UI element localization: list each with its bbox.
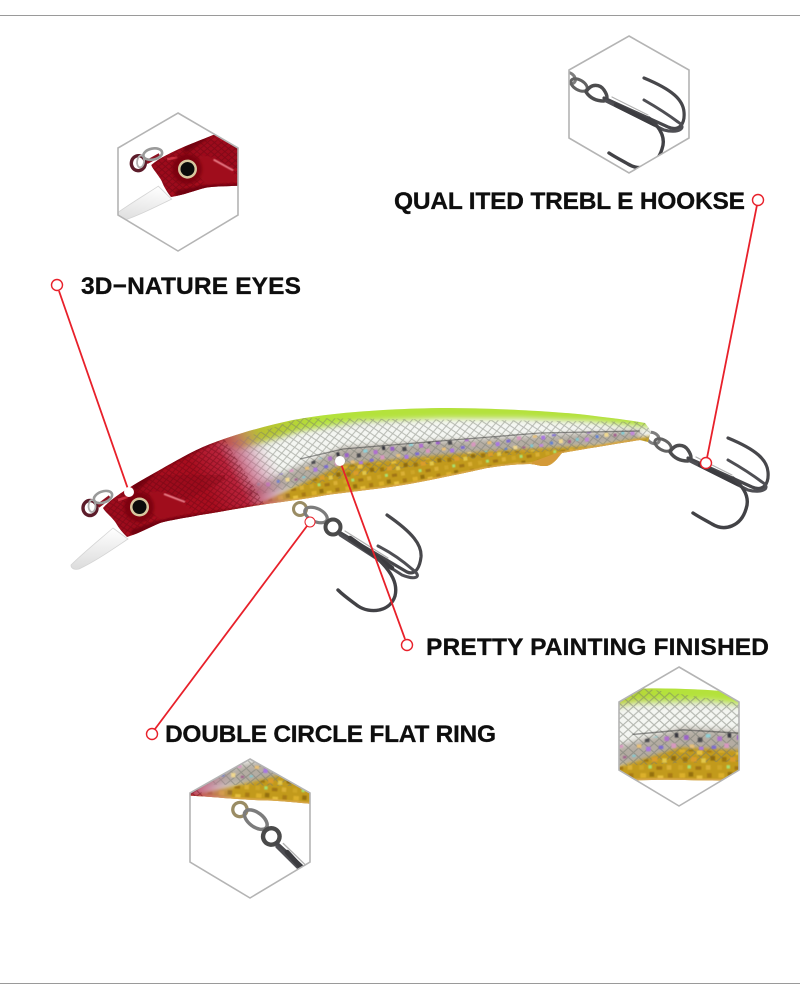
nose rings — [83, 489, 114, 516]
head colour — [95, 400, 290, 545]
leader line — [146, 517, 315, 740]
green back — [195, 396, 650, 449]
leader line — [52, 280, 134, 497]
leader line — [335, 456, 412, 650]
gold flakes — [225, 438, 650, 530]
head shading — [130, 434, 232, 492]
inset hexagon: paint close-up — [618, 666, 740, 807]
lip — [71, 528, 128, 569]
inset hexagon: ring close-up — [189, 758, 311, 899]
eye — [124, 492, 154, 522]
lure body — [95, 396, 660, 545]
label: painting: PRETTY PAINTING FINISHED — [426, 634, 769, 661]
scale crosshatch — [210, 418, 650, 500]
callout 1: 3D eyes — [50, 112, 300, 497]
callout 4: flat ring — [146, 516, 495, 899]
belly hook — [294, 502, 421, 611]
notch fill — [532, 451, 562, 467]
rim — [200, 440, 640, 515]
silver flank — [215, 418, 650, 482]
holographic glitter — [240, 429, 640, 495]
label: flat ring: DOUBLE CIRCLE FLAT RING — [165, 721, 496, 748]
tail hook — [644, 430, 768, 528]
top rule — [0, 15, 800, 16]
gold belly — [225, 436, 650, 540]
inset hexagon: eye close-up — [117, 112, 239, 252]
bottom rule — [0, 983, 800, 984]
lure photo illustration — [71, 396, 768, 611]
glitter zone — [235, 430, 640, 498]
lateral speckle line — [300, 431, 640, 459]
label: 3D nature eyes: 3D−NATURE EYES — [81, 273, 301, 300]
label: treble hooks: QUAL ITED TREBL E HOOKSE — [394, 188, 745, 215]
inset hexagon: hook close-up — [568, 35, 690, 174]
callout 2: treble hooks — [0, 36, 764, 468]
callout 3: painting — [335, 456, 800, 982]
leader line — [700, 194, 764, 468]
